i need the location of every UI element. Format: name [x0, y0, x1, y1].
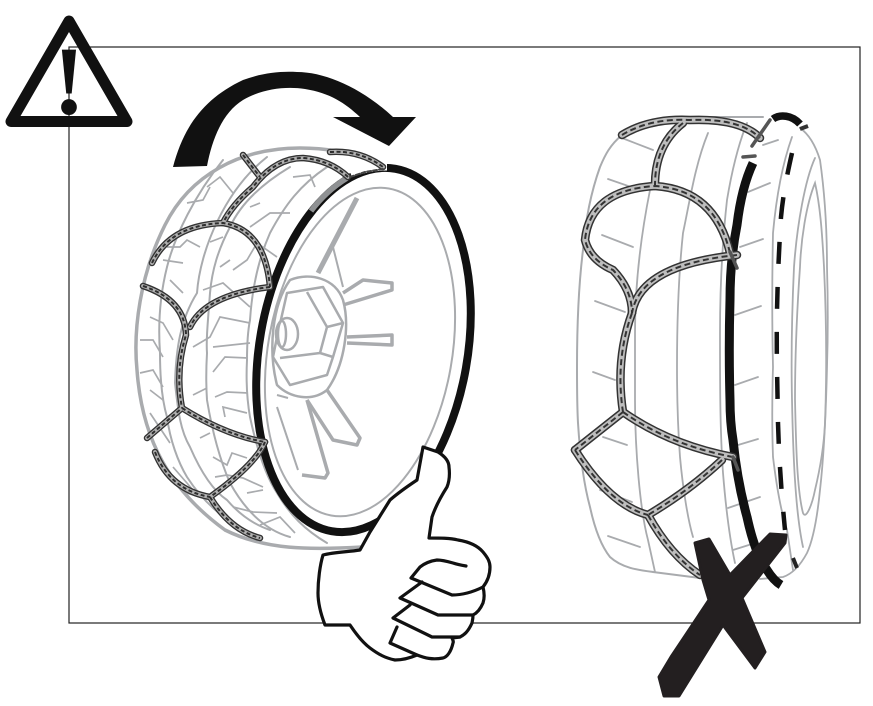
icon: thumbs up hand: [318, 447, 490, 660]
icon: black cross: [659, 534, 786, 696]
dashed line: [777, 153, 792, 530]
wheel hub nut: [272, 277, 346, 397]
tyre tread: [136, 148, 430, 548]
wheel rim ring: [229, 151, 498, 549]
tyre chain: [143, 152, 383, 538]
arrow: rotation direction: [173, 72, 416, 167]
black band: [729, 163, 781, 585]
tyre outline: [577, 135, 700, 578]
rim top gap and grey section: [350, 165, 387, 172]
sidewall and rim lines: [760, 128, 828, 579]
frame: [69, 47, 860, 623]
wheel spokes: [277, 198, 392, 478]
exclamation mark: !: [53, 28, 85, 134]
tread grooves: [635, 123, 747, 572]
icon: warning triangle: [11, 21, 127, 134]
tread ticks: [593, 138, 778, 550]
left wheel with chain: [136, 148, 498, 549]
grey rim section: [311, 178, 347, 211]
top of tyre: [622, 117, 763, 133]
inner rim line: [241, 173, 479, 531]
right chain: [575, 120, 770, 575]
black band top: [773, 116, 800, 124]
right tyre with incorrect chain fit: [575, 116, 828, 585]
lower dash: [793, 558, 797, 568]
